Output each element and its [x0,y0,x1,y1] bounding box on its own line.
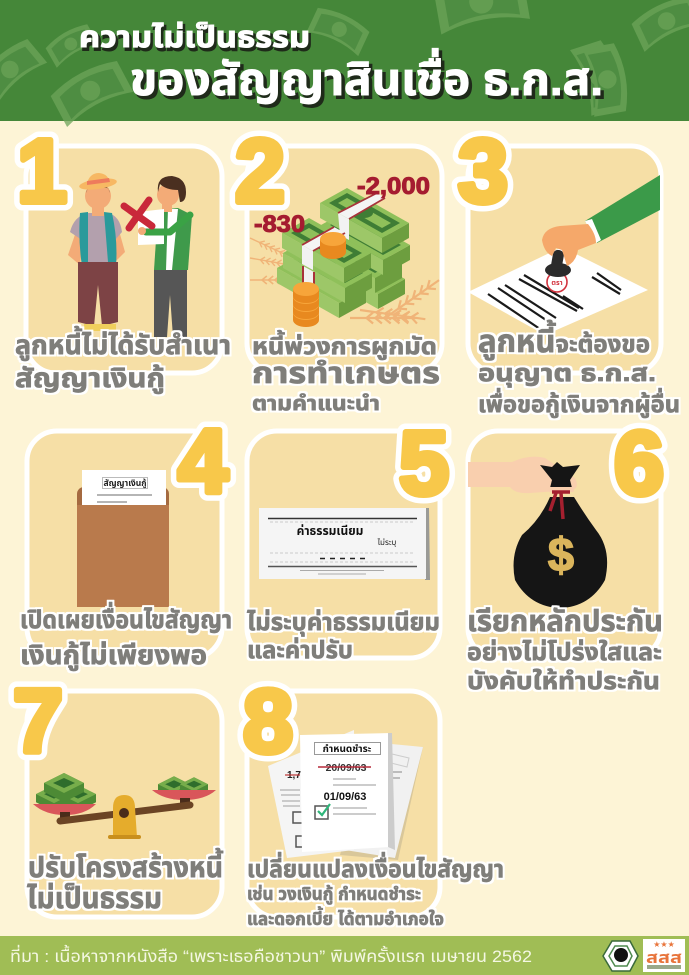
illustration: money bag [468,457,607,608]
number 3: 3 [458,122,508,222]
number 7: 7 [13,672,63,772]
title line 2: ของสัญญาสินเชื่อ ธ.ก.ส. [130,48,603,105]
illustration: contract papers [268,730,423,860]
caption 4 line 1: เปิดเผยเงื่อนไขสัญญา [20,602,232,634]
caption 5 line 1: ไม่ระบุค่าธรรมเนียม [247,608,440,637]
old date struck through: 20/09/63 [326,762,367,774]
title line 1: ความไม่เป็นธรรม [81,25,312,57]
panel 1 [15,122,231,394]
source text: ที่มา : เนื้อหาจากหนังสือ “เพราะเธอคือชาวนา” พิมพ์ครั้งแรก เมษายน 2562 [10,944,532,966]
caption 8 line 3: และดอกเบี้ย ได้ตามอำเภอใจ [247,906,444,929]
amount -2,000: -2,000 [357,173,430,200]
number 2: 2 [235,122,285,222]
caption 2 line 3: ตามคำแนะนำ [252,393,380,415]
number 2: 2 [235,122,285,222]
caption 8 line 2: เช่น วงเงินกู้ กำหนดชำระ [247,884,421,905]
caption 6 line 3: บังคับให้ทำประกัน [467,667,660,695]
due-date box [314,742,380,754]
number 4: 4 [178,412,228,512]
number 5: 5 [399,414,449,514]
illustration: envelope with contract [77,470,169,607]
number 6: 6 [614,414,664,514]
caption 4 line 2: เงินกู้ไม่เพียงพอ [20,640,207,671]
illustration: fee receipt [259,508,430,580]
number 1: 1 [17,122,67,222]
number 4: 4 [178,412,228,512]
number 6: 6 [614,414,664,514]
caption 2 line 1: หนี้พ่วงการผูกมัด [252,330,437,360]
logo: hexagon emblem [603,941,638,971]
illustration: envelope with contract: สัญญาเงินกู้ [103,478,147,488]
illustration: wheat [249,235,442,325]
illustration: farmer [68,173,125,331]
number 7: 7 [13,672,63,772]
receipt note: ไม่ระบุ [377,537,397,547]
caption 1 line 2: สัญญาเงินกู้ [15,363,165,394]
dollar sign: $ [548,528,574,581]
card 6 [468,431,661,658]
illustration: money stacks [277,188,410,327]
illustration: officer [138,176,192,337]
number 5: 5 [399,414,449,514]
caption 1 line 1: ลูกหนี้ไม่ได้รับสำเนา [15,326,231,361]
number 1: 1 [17,122,67,222]
caption 3 line 3: เพื่อขอกู้เงินจากผู้อื่น [478,388,680,418]
title line 2: ของสัญญาสินเชื่อ ธ.ก.ส. [133,51,606,108]
caption 7 line 1: ปรับโครงสร้างหนี้ [28,847,224,883]
number 8: 8 [243,672,293,772]
card 1 [26,146,222,373]
caption 6 line 1: เรียกหลักประกัน [467,606,663,638]
card 5 [247,431,440,658]
header banner [0,0,689,127]
illustration: document: ตรา [551,280,563,287]
caption 6 line 2: อย่างไม่โปร่งใสและ [467,638,662,666]
illustration: contract papers: กำหนดชำระ [323,743,372,755]
illustration: contract papers: 1,7 [287,770,301,781]
new date: 01/09/63 [324,791,366,803]
caption 5 line 2: และค่าปรับ [247,636,353,664]
panel 5 [247,414,449,664]
decorative money bills [0,0,689,127]
illustration: document [468,247,648,335]
card 7 [27,691,222,917]
card 4 [27,431,222,658]
title line 1: ความไม่เป็นธรรม [79,22,310,54]
number 3: 3 [458,122,508,222]
number 8: 8 [243,672,293,772]
panel 4 [20,412,232,671]
panel 3 [458,122,680,418]
card 8 [247,691,440,917]
illustration: unbalanced scale [33,773,216,839]
caption 3 line 1: ลูกหนี้จะต้องขอ [478,319,650,360]
footer bar [0,936,689,975]
logo: ThaiHealth: สสส [646,950,682,967]
panel 6 [467,414,664,695]
panel 7 [13,672,224,917]
logo: ThaiHealth [643,939,685,972]
caption 7 line 2: ไม่เป็นธรรม [27,883,162,915]
amount -830: -830 [254,211,305,238]
illustration: hand with stamp [542,175,660,277]
card 2 [247,146,442,373]
receipt heading: ค่าธรรมเนียม [297,524,363,538]
caption 2 line 2: การทำเกษตร [252,358,440,390]
panel 2 [235,122,442,415]
caption 3 line 2: อนุญาต ธ.ก.ส. [478,360,656,388]
caption 8 line 1: เปลี่ยนแปลงเงื่อนไขสัญญา [247,852,504,883]
icon: red X [124,200,152,228]
logo: ThaiHealth: ★★★ [653,940,675,949]
card 3 [468,146,661,373]
panel 8 [243,672,504,929]
